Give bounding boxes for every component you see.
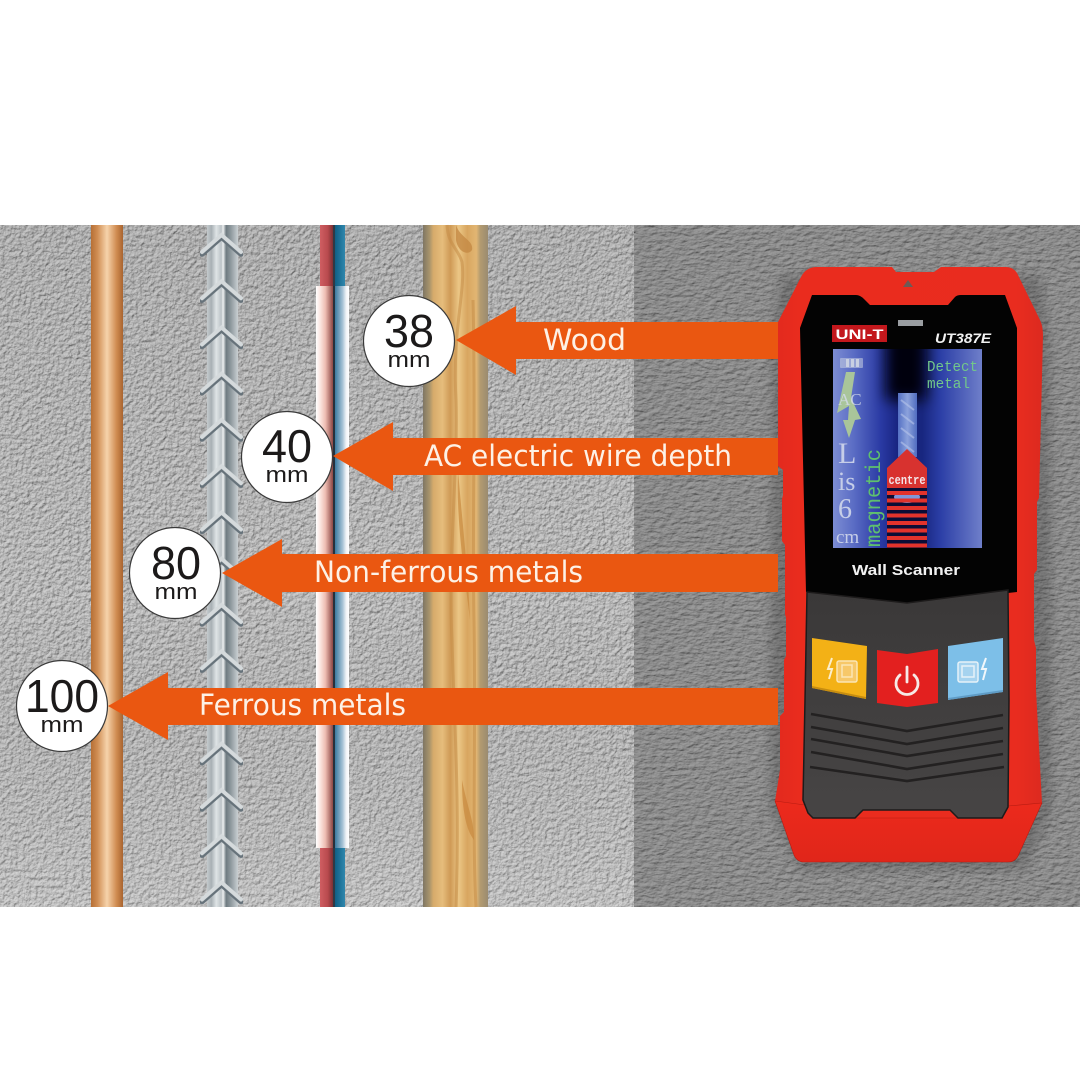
centre arrow and stripes: centre [888,473,926,488]
depth badge: 38 mm: mm [388,347,430,372]
speaker grille [810,714,1004,781]
depth badge: 80 mm: mm [154,579,198,604]
display screen [833,349,982,548]
brand logo: UNI-T: UNI-T [836,326,884,342]
label: wood: Wood [543,323,626,357]
yellow button [812,638,867,699]
depth badge: 80 mm [130,528,220,618]
distance readout: is [838,467,855,496]
label: non-ferrous metals: Non-ferrous metals [314,555,583,589]
brand logo: UNI-T [832,325,887,342]
centre arrow and stripes [887,449,927,548]
battery icon [840,358,863,368]
black front face [800,295,1017,604]
detect metal status: Detect [927,359,978,376]
arrow: non-ferrous metals [222,539,778,607]
detect metal status [928,361,976,388]
depth badge: 40 mm: 40 [262,420,312,472]
distance readout: L [838,437,856,470]
wood stud [423,225,488,907]
arrow: AC electric wire depth [333,422,778,491]
distance readout: cm [836,527,859,548]
dark gray button panel [803,590,1009,818]
label: ferrous metals: Ferrous metals [199,688,406,722]
model name: UT387E [935,330,992,346]
rebar on screen [898,393,917,457]
arrow: ferrous metals [108,672,778,740]
depth badge: 100 mm: 100 [25,670,99,722]
AC lightning icon: AC [838,390,862,409]
depth badge: 38 mm: 38 [384,305,434,357]
copper pipe [91,225,123,907]
wall scanner device [775,267,1043,862]
device red shell [775,267,1043,862]
depth badge: 100 mm [16,660,108,752]
panel: wall background [0,225,1080,907]
blue button [948,638,1003,700]
depth badge: 40 mm: mm [266,462,308,487]
device name: Wall Scanner [852,562,960,579]
label: AC electric wire depth: AC electric wire depth [424,439,732,473]
device shadow [770,275,1052,870]
device bottom cap [775,801,1042,862]
AC electric wire [316,225,349,907]
detect metal status: metal [927,376,970,393]
arrow: wood [456,306,778,375]
depth badge: 100 mm: mm [40,712,84,737]
distance readout: 6 [838,494,852,525]
AC lightning icon [837,372,862,438]
depth badge: 80 mm: 80 [151,537,201,589]
infographic: wall scanner detection depths [0,224,1080,908]
top notch indicator [903,280,913,287]
depth badge: 40 mm [242,412,332,502]
magnetic label: magnetic [864,449,887,547]
steel rebar [200,225,243,907]
depth badge: 38 mm [364,296,454,386]
status LED [898,320,923,326]
red power button [877,649,938,707]
